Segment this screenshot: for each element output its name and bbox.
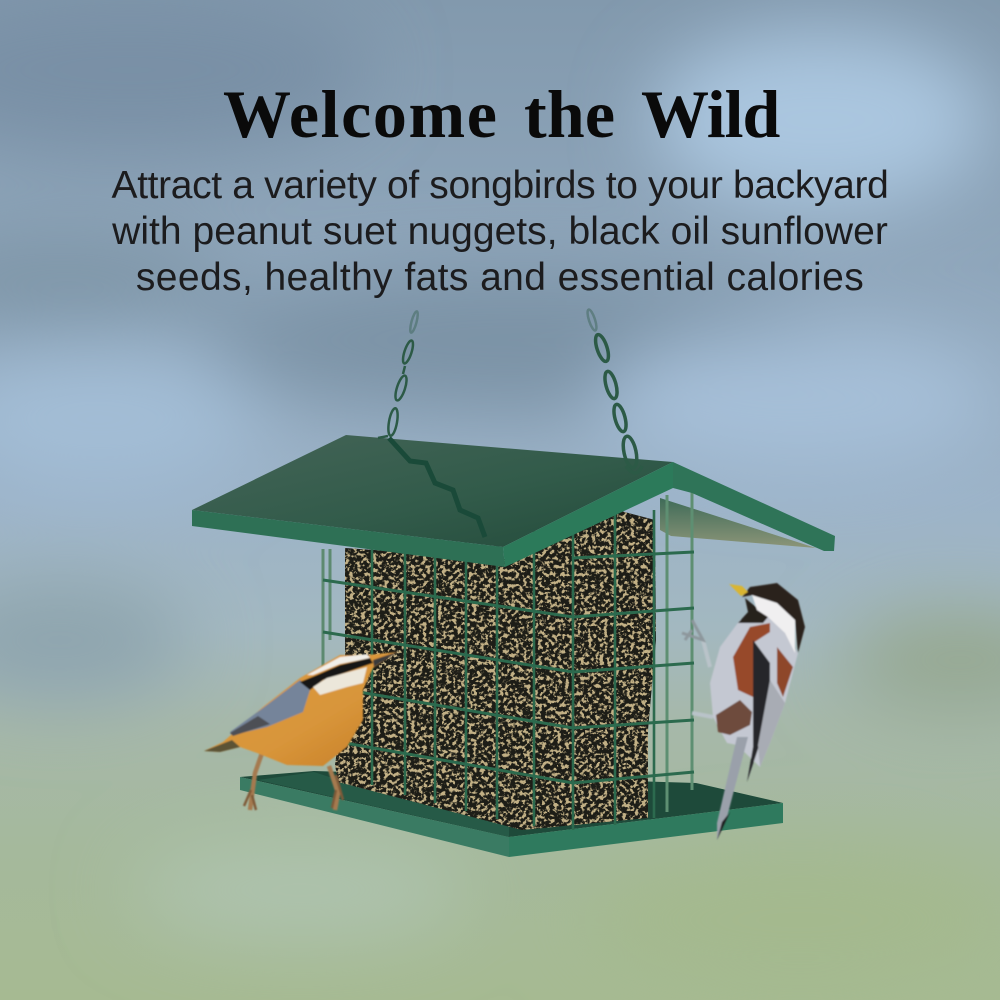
roof chain shadow bbox=[389, 438, 485, 537]
seed block bbox=[335, 510, 656, 830]
bird: chestnut-backed chickadee bbox=[682, 583, 805, 840]
subheading text: Attract a variety of songbirds to your backyard bbox=[112, 164, 888, 207]
hanging chains bbox=[378, 309, 642, 473]
bottom tray bbox=[240, 771, 783, 857]
roof front edge bbox=[192, 510, 505, 567]
subheading text bbox=[112, 164, 888, 299]
wire cage bbox=[323, 490, 694, 830]
far roof slope underside bbox=[660, 498, 816, 548]
roof bbox=[192, 435, 673, 547]
bird: red-breasted nuthatch bbox=[204, 652, 397, 810]
far roof slope bbox=[673, 462, 835, 551]
title: the bbox=[524, 76, 615, 152]
feeder with birds bbox=[192, 309, 835, 857]
title: Wild bbox=[641, 76, 779, 152]
subheading text: with peanut suet nuggets, black oil sunflower bbox=[112, 210, 888, 253]
title: Welcome bbox=[223, 76, 499, 152]
title bbox=[223, 76, 780, 152]
subheading text: seeds, healthy fats and essential calories bbox=[136, 256, 864, 299]
